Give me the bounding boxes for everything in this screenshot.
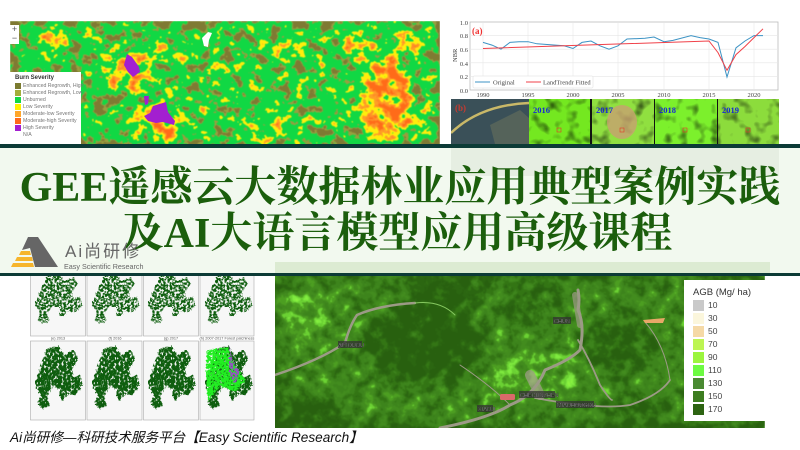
place labels: CHECUNZHEN [520, 393, 559, 399]
footer text: Ai尚研修—科研技术服务平台【Easy Scientific Research】 [10, 430, 363, 445]
thumbnail: aerial: (b) [455, 103, 466, 113]
place labels: XIAOJI [478, 407, 496, 413]
legend: AGB: 130 [708, 378, 722, 388]
tile captions: (f) 2016 [108, 336, 122, 340]
legend: burn severity: Unburned [23, 97, 46, 103]
series: LandTrendr fitted [483, 29, 763, 70]
legend: burn severity: High Severity [23, 125, 54, 131]
place labels [338, 317, 596, 413]
x axis labels: 2020 [748, 92, 760, 99]
cloud gap [202, 32, 212, 47]
x axis labels: 1990 [476, 92, 490, 99]
legend: AGB: AGB (Mg/ ha) [693, 287, 751, 298]
zoom control: + [12, 24, 17, 34]
logo tagline: Easy Scientific Research [64, 262, 144, 271]
satellite thumbnails [451, 99, 779, 144]
road shield [500, 394, 515, 400]
x axis labels [476, 92, 760, 99]
chart legend: Original [493, 80, 515, 86]
legend: AGB: 10 [708, 300, 717, 310]
tile captions: (h) 2007-2017 Forest patchiness [200, 336, 255, 340]
legend: AGB: 170 [708, 404, 722, 414]
chart legend [473, 76, 593, 88]
y axis labels: 0.6 [460, 47, 469, 54]
legend: burn severity [10, 72, 81, 144]
x axis labels: 2000 [566, 92, 580, 99]
legend: burn severity: Moderate-low Severity [23, 111, 75, 117]
thumbnail: 2017: 2017 [596, 105, 614, 115]
legend: AGB: 50 [708, 326, 717, 336]
legend: AGB: 30 [708, 313, 717, 323]
thumbnail: aerial [451, 99, 529, 144]
forest cover small multiples [30, 276, 255, 420]
legend: burn severity: Moderate-high Severity [23, 118, 77, 124]
thumbnail: 2019 [718, 99, 779, 144]
orange patch [643, 318, 665, 323]
tile row: lower [30, 341, 254, 420]
thumbnail: 2016 [529, 99, 590, 144]
y axis labels: 0.2 [460, 74, 468, 81]
logo name: Ai尚研修 [65, 242, 141, 261]
legend: burn severity: N/A [23, 132, 32, 138]
burned patches: high severity [124, 54, 175, 125]
panel tag: (a) [472, 26, 482, 36]
x axis labels: 2005 [612, 92, 624, 99]
legend: burn severity: Burn Severity [15, 75, 54, 81]
tile row: upper [30, 268, 254, 336]
ghost image: lower right [275, 262, 770, 273]
legend: AGB: 70 [708, 339, 717, 349]
legend: AGB: 110 [708, 365, 722, 375]
thumbnail: 2016: 2016 [533, 105, 550, 115]
line chart: NBR time series [452, 20, 778, 99]
bottom rule [0, 273, 800, 276]
tile captions [51, 336, 255, 340]
legend: AGB: 150 [708, 391, 722, 401]
logo: Ai尚研修 [11, 237, 144, 271]
x axis labels: 2015 [702, 92, 716, 99]
logo mark [11, 237, 58, 267]
legend: burn severity: Low Severity [23, 104, 53, 110]
ghost image: upper right [451, 148, 779, 176]
zoom control: − [12, 33, 17, 43]
place labels: MIAOHOUGOU [557, 403, 596, 409]
y axis title: NBR [452, 48, 459, 62]
map: aboveground biomass [275, 276, 765, 428]
thumbnail: 2018: 2018 [659, 105, 676, 115]
x axis labels: 1995 [522, 92, 534, 99]
y axis labels: 1.0 [460, 20, 468, 27]
tile captions: (g) 2017 [164, 336, 178, 340]
y axis labels: 0.4 [460, 61, 469, 68]
y axis labels: 0.8 [460, 33, 468, 40]
tile captions: (e) 2013 [51, 336, 65, 340]
x axis labels: 2010 [658, 92, 670, 99]
roads and settlements [275, 290, 670, 428]
legend: AGB: 90 [708, 352, 717, 362]
thumbnail: 2017 [592, 99, 654, 144]
chart legend: LandTrendr Fitted [543, 80, 591, 86]
legend: burn severity: Enhanced Regrowth, High [23, 83, 84, 89]
zoom control [10, 25, 19, 44]
place labels: CHUN [554, 319, 570, 325]
legend: burn severity: Enhanced Regrowth, Low [23, 90, 82, 96]
title band [0, 144, 800, 276]
map: burn severity [10, 21, 440, 144]
title line 2: 及AI大语言模型应用高级课程 [122, 211, 672, 257]
legend: AGB [684, 280, 765, 421]
y axis labels [460, 20, 469, 95]
place labels: ALTOUOU [338, 343, 364, 349]
top rule [0, 144, 800, 148]
thumbnail: 2019: 2019 [722, 105, 739, 115]
y axis labels: 0.0 [460, 88, 468, 95]
title line 1: GEE遥感云大数据林业应用典型案例实践 [20, 165, 780, 211]
thumbnail: 2018 [655, 99, 717, 144]
series: original [483, 36, 763, 77]
